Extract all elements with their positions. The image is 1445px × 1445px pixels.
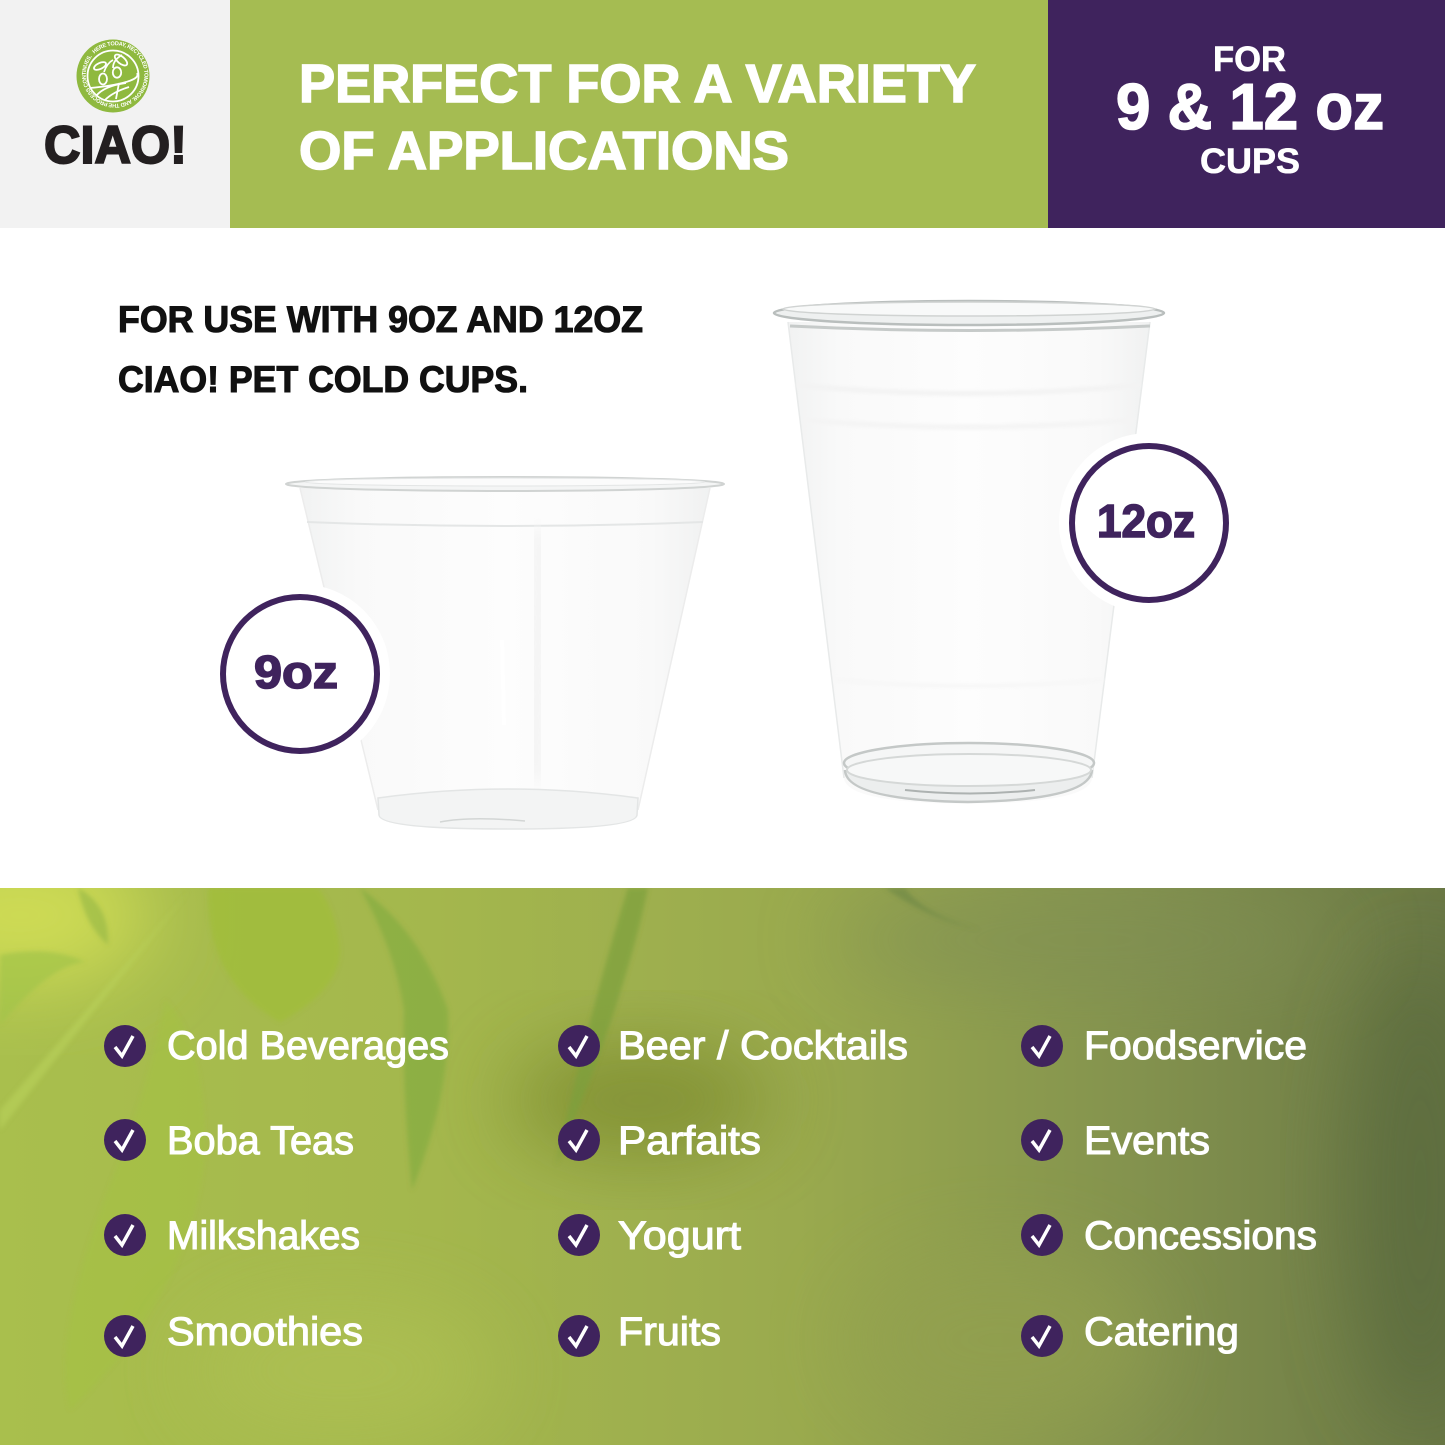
badge: 9oz (210, 584, 390, 764)
item: Concessions: Concessions (1084, 1214, 1317, 1258)
item: Foodservice: Foodservice (1084, 1024, 1307, 1068)
item: Cold Beverages: Cold Beverages (167, 1024, 449, 1068)
badge: 12oz (1059, 433, 1239, 613)
size label: CUPS (1200, 142, 1300, 181)
size label (1116, 40, 1384, 181)
image: 9oz clear cup (286, 477, 724, 829)
checklist: column 3 (1021, 1024, 1317, 1357)
item: Smoothies (104, 1310, 363, 1357)
checklist: column 2 (558, 1024, 908, 1357)
header panel: cup sizes (1048, 0, 1445, 228)
item: Fruits: Fruits (618, 1310, 721, 1354)
item: Milkshakes: Milkshakes (167, 1214, 360, 1258)
size label: FOR (1213, 40, 1286, 79)
item: Catering: Catering (1084, 1310, 1239, 1354)
heading: PERFECT FOR A VARIETY (299, 54, 976, 114)
icon: olive seal: HERE TODAY, RECYCLED TOMORROW. AND THE PROCESS CONTINUES. (82, 41, 148, 108)
item: Parfaits (558, 1119, 761, 1163)
header panel: title (230, 0, 1048, 228)
panel: applications background (0, 845, 1445, 1445)
badge: 12oz: 12oz (1097, 495, 1195, 547)
heading: OF APPLICATIONS (299, 121, 789, 181)
checklist: column 1 (104, 1024, 449, 1357)
decorative olive branch (0, 888, 943, 1186)
item: Smoothies: Smoothies (167, 1310, 363, 1354)
item: Events (1021, 1119, 1210, 1163)
text block: compatibility note: FOR USE WITH 9OZ AND 12OZ (118, 299, 643, 340)
item: Beer / Cocktails: Beer / Cocktails (618, 1024, 908, 1068)
wordmark: CIAO!: CIAO! (44, 116, 187, 175)
text block: compatibility note: CIAO! PET COLD CUPS. (118, 359, 528, 400)
item: Fruits (558, 1310, 721, 1357)
item: Parfaits: Parfaits (618, 1119, 761, 1163)
item: Yogurt (558, 1214, 741, 1258)
size label: 9 & 12 oz (1116, 70, 1384, 143)
badge: 9oz: 9oz (254, 646, 338, 698)
item: Boba Teas: Boba Teas (167, 1119, 354, 1163)
item: Events: Events (1084, 1119, 1210, 1163)
item: Catering (1021, 1310, 1239, 1357)
image: 12oz clear cup (774, 301, 1164, 804)
item: Yogurt: Yogurt (618, 1214, 741, 1258)
header panel: logo (0, 0, 230, 228)
